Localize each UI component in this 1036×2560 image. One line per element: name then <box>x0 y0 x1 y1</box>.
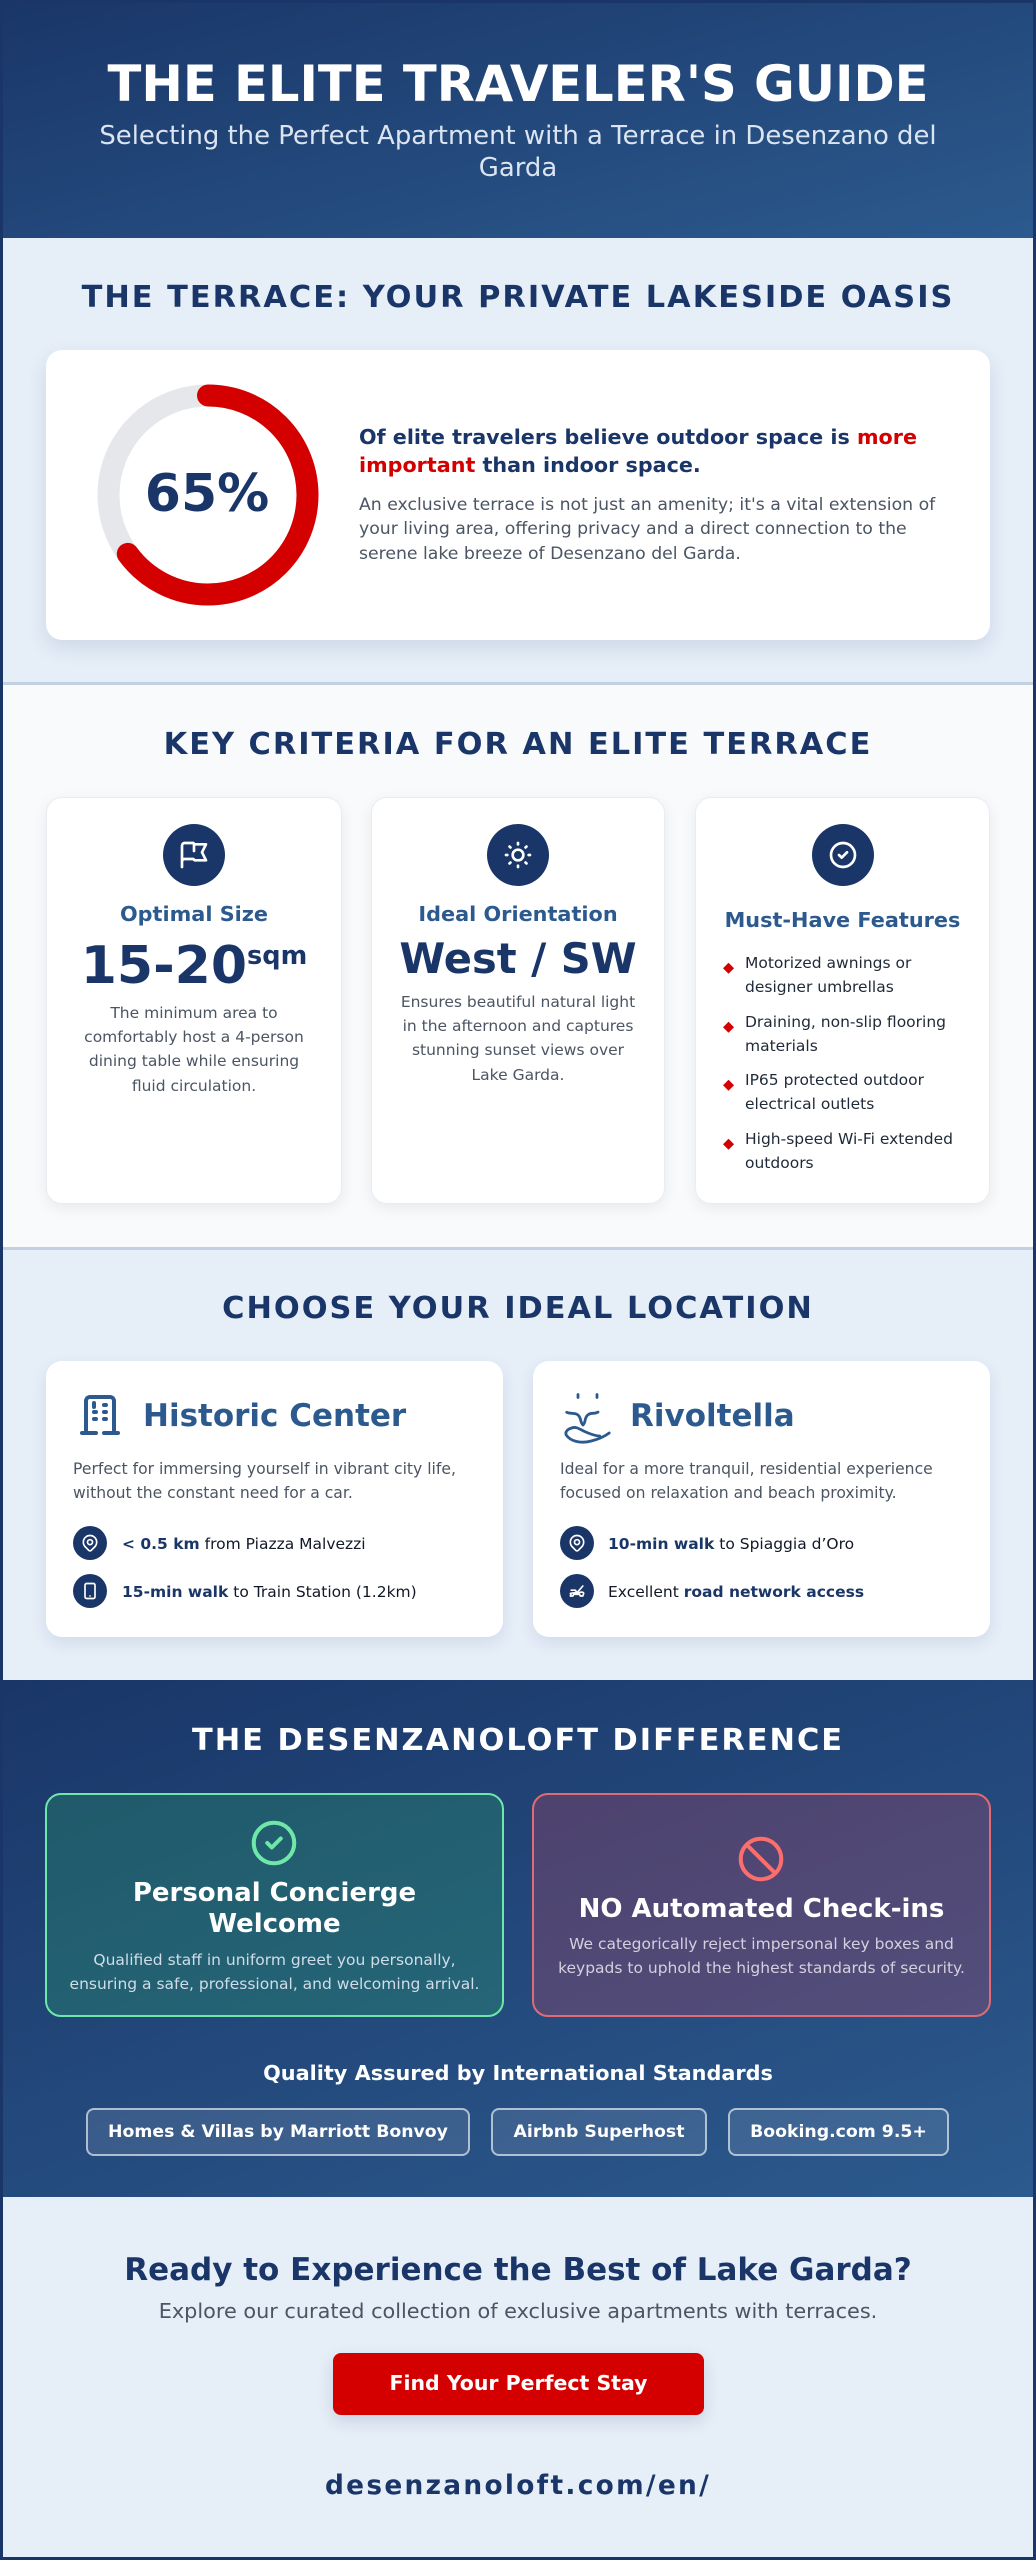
fact: beach distance <box>560 1526 854 1560</box>
description <box>560 1460 933 1502</box>
card title: Ideal Orientation <box>418 902 618 926</box>
feature list <box>723 954 953 1172</box>
stat description <box>359 495 936 564</box>
description: without the constant need for a car. <box>73 1484 353 1502</box>
feature: wi-fi: ◆ <box>723 1136 734 1152</box>
size value: 15-20sqm <box>81 936 307 996</box>
panel: desenzanoloft difference <box>3 1680 1033 2197</box>
description: keypads to uphold the highest standards of security. <box>558 1959 965 1977</box>
description: dining table while ensuring <box>89 1052 299 1070</box>
icon: beach waves <box>564 1393 611 1444</box>
card: ideal orientation <box>371 797 665 1204</box>
stat card <box>46 350 990 640</box>
feature: awnings: designer umbrellas <box>745 978 894 996</box>
stat description: An exclusive terrace is not just an amenity; it's a vital extension of <box>359 495 935 515</box>
heading: THE DESENZANOLOFT DIFFERENCE <box>192 1723 844 1758</box>
icon: check <box>252 1820 296 1866</box>
badge: booking <box>728 2108 949 2156</box>
panel: locations <box>3 1250 1033 1680</box>
card title: Optimal Size <box>120 902 268 926</box>
card title <box>133 1878 416 1939</box>
panel: header <box>0 0 1036 238</box>
fact: road access <box>560 1574 864 1608</box>
icon: flag <box>163 824 225 886</box>
stat headline: Of elite travelers believe outdoor space is more <box>359 425 917 449</box>
feature: flooring <box>723 1013 946 1055</box>
description <box>73 1460 456 1502</box>
stat description: your living area, offering privacy and a direct connection to the <box>359 519 907 539</box>
cta button <box>333 2353 704 2415</box>
description <box>84 1004 304 1095</box>
cta heading: Ready to Experience the Best of Lake Garda? <box>124 2252 912 2288</box>
icon: pin <box>560 1526 594 1560</box>
card: rivoltella <box>533 1361 990 1637</box>
icon: building <box>80 1395 120 1435</box>
badge: marriott: Homes & Villas by Marriott Bonvoy <box>108 2122 448 2142</box>
description <box>558 1935 965 1977</box>
card: historic center <box>46 1361 503 1637</box>
fact: train station <box>73 1574 417 1608</box>
feature: wi-fi: outdoors <box>745 1154 814 1172</box>
description: Ensures beautiful natural light <box>401 993 635 1011</box>
badge: airbnb: Airbnb Superhost <box>514 2122 684 2142</box>
fact: piazza distance: < 0.5 km from Piazza Malvezzi <box>122 1535 366 1553</box>
stat headline <box>359 425 917 477</box>
description: We categorically reject impersonal key boxes and <box>569 1935 954 1953</box>
icon: ban <box>738 1836 784 1882</box>
description: comfortably host a 4-person <box>84 1028 304 1046</box>
icon: pin <box>73 1526 107 1560</box>
card: must-have features <box>695 797 990 1204</box>
feature: outlets: ◆ <box>723 1077 734 1093</box>
heading: CHOOSE YOUR IDEAL LOCATION <box>222 1291 814 1326</box>
stat value: 65% <box>145 464 269 524</box>
card title: Must-Have Features <box>725 908 960 932</box>
card title: NO Automated Check-ins <box>579 1894 944 1924</box>
cta button: Find Your Perfect Stay <box>389 2371 648 2395</box>
location name: Historic Center <box>143 1398 406 1434</box>
card: optimal size <box>46 797 342 1204</box>
description: ensuring a safe, professional, and welcoming arrival. <box>70 1975 479 1993</box>
panel: call to action <box>3 2197 1033 2557</box>
icon: sun <box>487 824 549 886</box>
feature: awnings <box>723 954 912 996</box>
stat description: serene lake breeze of Desenzano del Garda. <box>359 544 741 564</box>
orientation value: West / SW <box>399 934 637 983</box>
donut chart: 65% <box>98 384 318 606</box>
description: Perfect for immersing yourself in vibrant city life, <box>73 1460 456 1478</box>
description: focused on relaxation and beach proximity. <box>560 1484 897 1502</box>
feature: flooring: Draining, non-slip flooring <box>745 1013 946 1031</box>
heading: THE TERRACE: YOUR PRIVATE LAKESIDE OASIS <box>82 280 954 315</box>
description: stunning sunset views over <box>412 1041 624 1059</box>
card: no automated check-ins <box>532 1793 991 2017</box>
feature: outlets: IP65 protected outdoor <box>745 1071 924 1089</box>
icon: check circle <box>812 824 874 886</box>
subtitle <box>99 121 937 182</box>
feature: wi-fi <box>723 1130 953 1172</box>
description: Qualified staff in uniform greet you personally, <box>93 1951 456 1969</box>
quality heading: Quality Assured by International Standards <box>263 2061 773 2085</box>
description: Ideal for a more tranquil, residential experience <box>560 1460 933 1478</box>
card: concierge welcome <box>45 1793 504 2017</box>
badge: marriott <box>86 2108 470 2156</box>
description <box>401 993 635 1084</box>
panel: key criteria <box>3 685 1033 1250</box>
website url: desenzanoloft.com/en/ <box>325 2470 711 2501</box>
icon: road <box>560 1574 594 1608</box>
feature: flooring: materials <box>745 1037 818 1055</box>
fact: piazza distance <box>73 1526 366 1560</box>
stat headline: important than indoor space. <box>359 453 701 477</box>
feature: awnings: Motorized awnings or <box>745 954 911 972</box>
card title: Welcome <box>208 1909 341 1939</box>
fact: road access: Excellent road network access <box>608 1583 864 1601</box>
card title: Personal Concierge <box>133 1878 416 1908</box>
description: in the afternoon and captures <box>403 1017 633 1035</box>
badge: booking: Booking.com 9.5+ <box>750 2122 927 2142</box>
description: The minimum area to <box>110 1004 278 1022</box>
feature: flooring: ◆ <box>723 1019 734 1035</box>
badge: airbnb <box>491 2108 707 2156</box>
subtitle: Garda <box>479 152 557 182</box>
fact: train station: 15-min walk to Train Station (1.2km) <box>122 1583 417 1601</box>
description: fluid circulation. <box>132 1077 256 1095</box>
cta text: Explore our curated collection of exclusive apartments with terraces. <box>159 2299 877 2323</box>
icon: phone <box>73 1574 107 1608</box>
subtitle: Selecting the Perfect Apartment with a Terrace in Desenzano del <box>99 121 937 151</box>
feature: wi-fi: High-speed Wi-Fi extended <box>745 1130 953 1148</box>
panel: terrace oasis <box>3 238 1033 685</box>
feature: outlets: electrical outlets <box>745 1095 874 1113</box>
title: THE ELITE TRAVELER'S GUIDE <box>108 55 928 113</box>
description <box>70 1951 479 1993</box>
heading: KEY CRITERIA FOR AN ELITE TERRACE <box>164 727 872 762</box>
description: Lake Garda. <box>472 1066 564 1084</box>
location name: Rivoltella <box>630 1398 795 1434</box>
feature: awnings: ◆ <box>723 960 734 976</box>
fact: beach distance: 10-min walk to Spiaggia d’Oro <box>608 1535 854 1553</box>
feature: outlets <box>723 1071 924 1113</box>
